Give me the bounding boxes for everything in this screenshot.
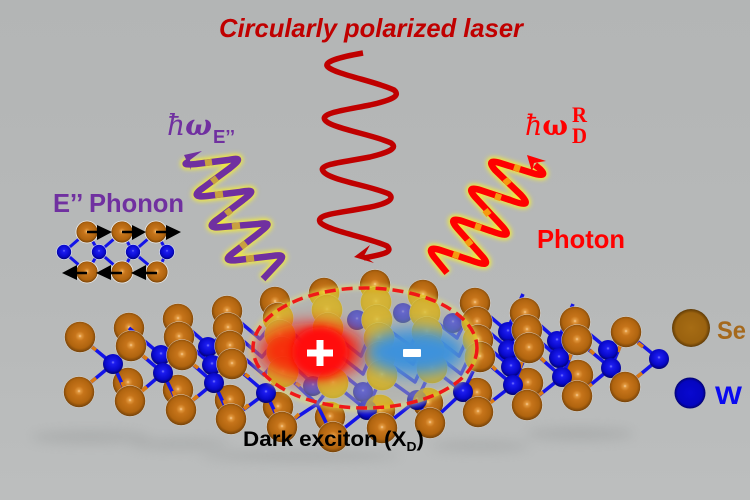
- upper back bonds: [178, 294, 573, 374]
- label: dark exciton: Dark exciton (X: [243, 428, 396, 451]
- phonon lattice inset: [56, 221, 181, 283]
- label: photon energy: [525, 102, 588, 148]
- label: photon energy: D: [572, 123, 587, 148]
- minus sign: [403, 349, 421, 357]
- heading: Photon: Photon: [537, 224, 625, 254]
- label: dark exciton: D: [406, 439, 417, 454]
- label: photon energy: R: [572, 102, 588, 127]
- arrow: laser wave: [320, 53, 396, 263]
- legend: W: W: [715, 382, 742, 410]
- label: phonon energy: E’’: [213, 127, 235, 147]
- arrow: phonon wave: [184, 151, 282, 279]
- plus sign: [307, 340, 333, 366]
- bonds: [79, 322, 659, 437]
- arrow: photon wave: [431, 155, 546, 273]
- label: photon energy: ħω: [525, 109, 568, 142]
- label: phonon energy: [167, 108, 235, 147]
- back selenium atoms: [112, 296, 594, 432]
- label: phonon energy: ħω: [167, 108, 212, 142]
- legend: W: [674, 378, 742, 410]
- orange bond stubs: [91, 343, 643, 418]
- front selenium atoms: [64, 270, 642, 452]
- title: Circularly polarized laser: [219, 13, 525, 43]
- lattice shadow: [30, 428, 635, 461]
- heading: E'' Phonon: E’’ Phonon: [53, 188, 184, 218]
- tungsten atoms: [103, 303, 669, 420]
- label: dark exciton: ): [417, 428, 424, 451]
- crystal lattice: [64, 270, 669, 452]
- legend: Se: [672, 309, 746, 347]
- legend: Se: Se: [717, 317, 746, 345]
- exciton cloud: [246, 282, 483, 415]
- dashed exciton ellipse: [253, 288, 477, 408]
